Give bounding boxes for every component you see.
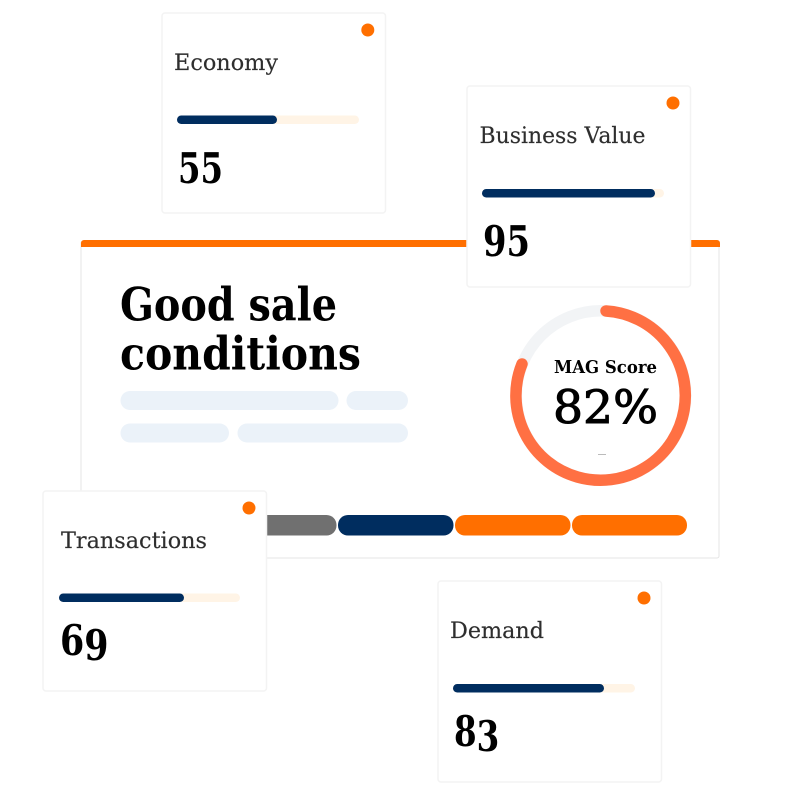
card: Demand: 8 [454,707,477,756]
card: Transactions: Transactions [61,529,207,554]
card: Demand [438,581,662,782]
card: Demand: Demand [450,619,544,644]
card: Economy: 55 [178,144,223,193]
donut chart: MAG Score [516,311,686,480]
card: Transactions [43,491,266,691]
heading: conditions [120,326,361,380]
donut chart: MAG Score: 82% [553,380,658,434]
card: Economy [162,13,386,213]
card: Business Value [467,86,690,287]
heading [120,278,361,380]
card: Transactions: 6 [60,617,84,666]
donut chart: MAG Score: MAG Score [554,357,657,378]
panel: main sale conditions [81,240,720,558]
card: Business Value: 95 [483,217,530,266]
card: Economy: Economy [174,51,279,76]
card: Transactions: 9 [84,622,108,671]
card: Business Value: Business Value [480,124,646,149]
placeholder text lines [120,391,408,442]
panel top accent bar [81,240,720,247]
score segment bar [200,515,687,536]
heading: Good sale [120,278,337,332]
card: Demand: 3 [477,712,499,761]
